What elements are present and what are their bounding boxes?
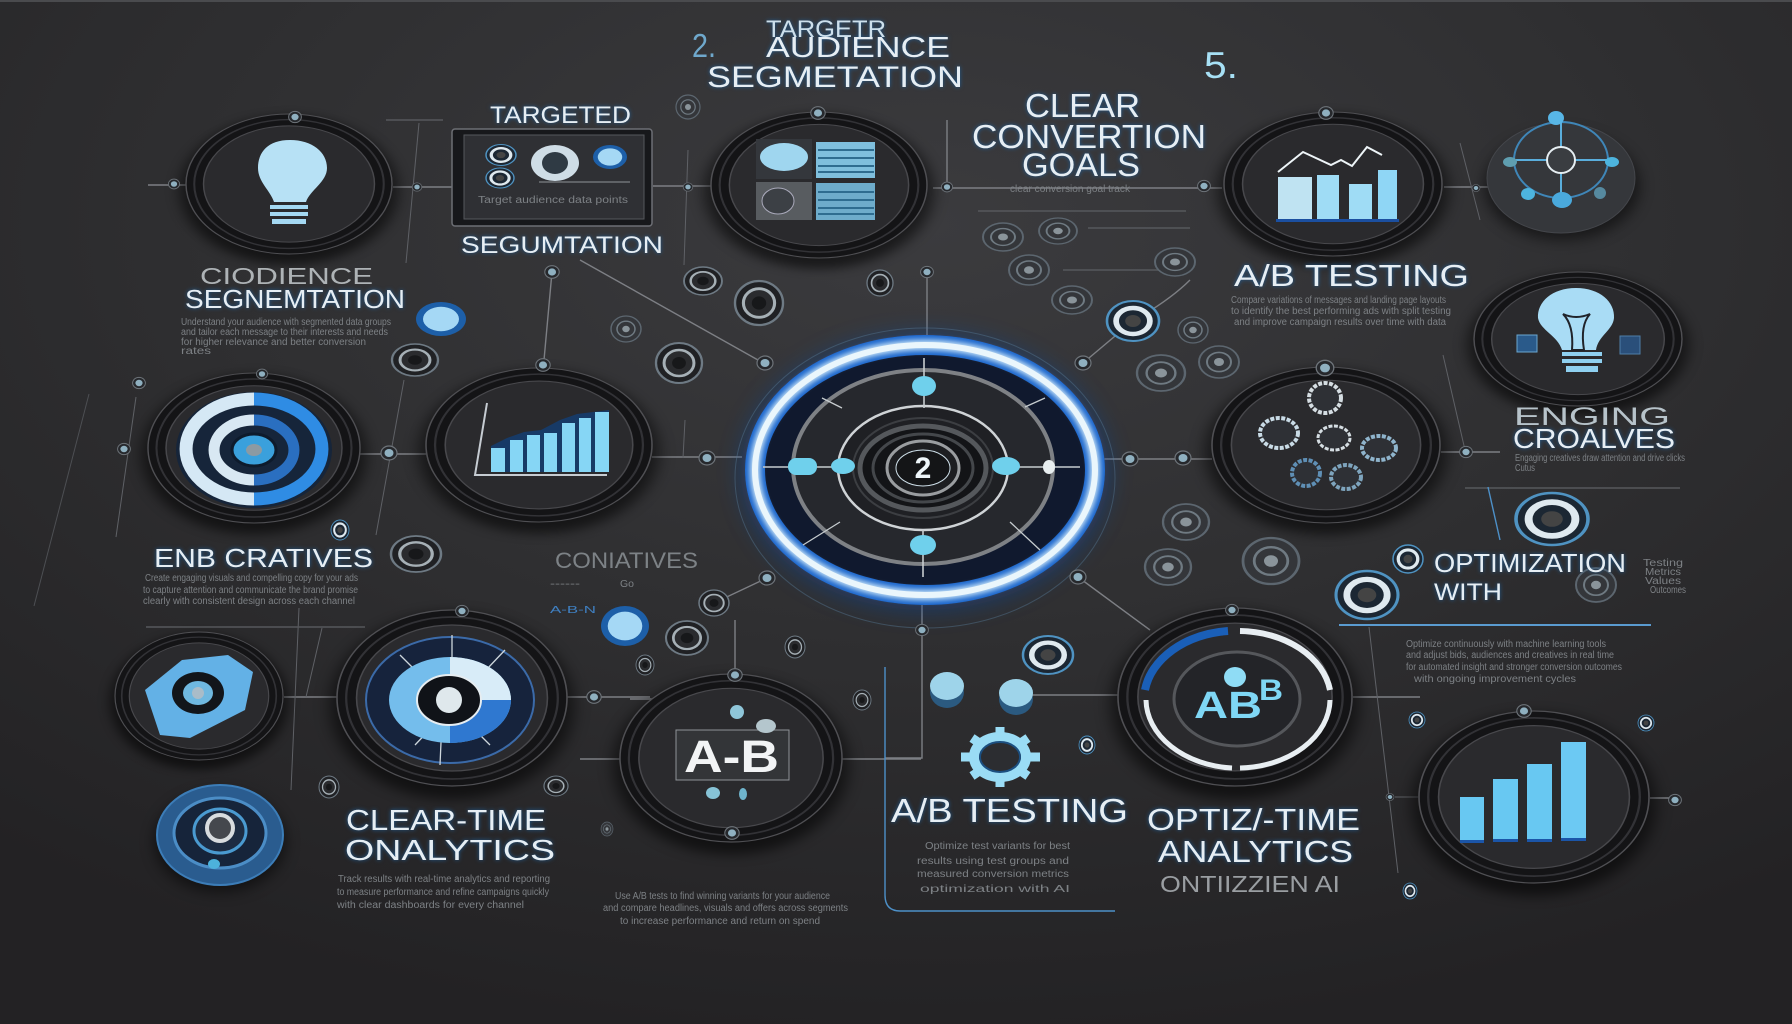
icon: target rings [176, 392, 332, 508]
text block: optimization body: with ongoing improvement cycles [1413, 674, 1576, 685]
text block: analytics body [336, 874, 550, 911]
text block: audience body: Understand your audience with segmented data groups [181, 317, 391, 328]
icon: AB dial: B [1259, 674, 1283, 707]
label: optimization with: WITH [1434, 579, 1502, 606]
icon: growth chart ring [419, 368, 659, 534]
icon: radar ring [330, 610, 574, 799]
label: targeted: TARGETED [490, 102, 631, 129]
text block: creatives body [143, 573, 358, 607]
icon: chart ring [1217, 112, 1449, 267]
icon: blue swirl disc [154, 785, 286, 892]
label: optiz-time analytics [1147, 802, 1360, 869]
icon: A/B knobs [930, 672, 1033, 715]
icon: AB dial ring [1111, 608, 1359, 799]
label: audience segmentation: SEGNEMTATION [185, 284, 405, 314]
label: clear conversion goals: CLEAR [1025, 87, 1140, 124]
label: clear-time analytics: CLEAR-TIME [346, 805, 546, 837]
heading: targeted audience segmentation: SEGMETATION [707, 61, 963, 94]
icon: bulb ring with chips [1468, 272, 1688, 416]
text block: creatives body: to capture attention and communicate the brand promise [143, 585, 358, 596]
icon: target ring [142, 373, 366, 534]
small satellite icons [319, 95, 1654, 899]
chart: four rising bars [1460, 742, 1586, 843]
icon: A-B badge ring [613, 674, 849, 855]
text block: A/B lower body: Optimize test variants for best [925, 841, 1070, 852]
text block: audience body [181, 317, 391, 357]
text block: optimization body: and adjust bids, audiences and creatives in real time [1406, 650, 1614, 661]
text block: A/B testing body [1231, 295, 1451, 328]
label: engaging creatives: ENGING [1514, 403, 1670, 431]
small right notes: Values [1645, 576, 1681, 587]
label: optimization with [1434, 548, 1626, 606]
hub inner rings [763, 358, 1080, 577]
text block: analytics body: with clear dashboards for every channel [336, 900, 524, 911]
outer ring connection pins [118, 107, 1681, 839]
heading: targeted audience segmentation [707, 16, 963, 94]
label: optimization AI: ONTIIZZIEN AI [1160, 871, 1340, 897]
label: optimization with: OPTIMIZATION [1434, 548, 1626, 578]
text block: A-B body: Use A/B tests to find winning variants for your audience [615, 891, 830, 902]
label: audience segmentation: CIODIENCE [200, 263, 373, 289]
text block: analytics body: Track results with real-time analytics and reporting [338, 874, 550, 885]
label: engaging creatives [1513, 403, 1675, 454]
text block: creatives body [1515, 453, 1685, 474]
icon: gear [961, 727, 1040, 787]
text block: A/B lower body [917, 841, 1070, 895]
small right notes: Outcomes [1650, 585, 1686, 596]
hub number: 2 [915, 452, 931, 485]
chart: bars with trend line [1276, 147, 1399, 222]
icon: A-B label panel [676, 705, 789, 800]
label: clear conversion goals: GOALS [1022, 147, 1140, 183]
hub glow [741, 334, 1109, 610]
text block: analytics body: to measure performance and refine campaigns quickly [337, 887, 549, 898]
icon: AB dial [1145, 631, 1330, 768]
label: segumtation: SEGUMTATION [461, 232, 663, 259]
icon: gear cluster [1260, 383, 1396, 489]
small right notes: Metrics [1645, 567, 1681, 578]
icon: data panel ring [705, 112, 933, 269]
small caption coniatives: Go [620, 579, 634, 590]
text block: A/B lower body: results using test groups and [917, 856, 1069, 867]
number 2: 2. [692, 27, 716, 64]
text block: A/B testing body: to identify the best performing ads with split testing [1231, 306, 1451, 317]
label: clear conversion goals [972, 87, 1206, 183]
label: clear-time analytics [345, 805, 555, 867]
label: clear-time analytics: ONALYTICS [345, 835, 555, 867]
panel: tablet: Target audience data points [478, 195, 628, 206]
text block: creatives body: clearly with consistent design across each channel [143, 596, 355, 607]
chart: rising bars [475, 403, 609, 475]
small caption coniatives [550, 579, 634, 616]
small right notes: Testing [1643, 558, 1683, 569]
text block: A/B lower body: measured conversion metrics [917, 869, 1069, 880]
text block: A/B testing body: Compare variations of messages and landing page layouts [1231, 295, 1446, 306]
text block: optimization body: for automated insight and stronger conversion outcomes [1406, 662, 1622, 673]
text block: A-B body [603, 891, 848, 927]
small caption under goals: clear conversion goal track [1010, 184, 1131, 195]
icon: A-B label panel: A-B [684, 731, 779, 782]
label: A/B testing lower: A/B TESTING [891, 792, 1128, 829]
text block: A-B body: to increase performance and return on spend [620, 916, 820, 927]
hub nodes [788, 376, 1055, 555]
icon: bulb with filament [1517, 288, 1640, 372]
text block: optimization body [1406, 639, 1622, 685]
text block: creatives body: Cutus [1515, 463, 1535, 474]
text block: creatives body: Create engaging visuals and compelling copy for your ads [145, 573, 358, 584]
label: creatives left: ENB CRATIVES [154, 543, 373, 573]
icon: hexagon dial ring [110, 632, 288, 770]
label: coniatives: CONIATIVES [555, 548, 698, 573]
label: optiz-time analytics: OPTIZ/-TIME [1147, 802, 1360, 837]
number 5: 5. [1204, 45, 1238, 86]
icon: radar dial [366, 635, 534, 765]
text block: audience body: and tailor each message to their interests and needs [181, 327, 388, 338]
icon: network disc [1484, 111, 1640, 240]
text block: A/B testing body: and improve campaign results over time with data [1234, 317, 1446, 328]
text block: optimization body: Optimize continuously with machine learning tools [1406, 639, 1606, 650]
small caption coniatives: ------ [550, 579, 580, 590]
small caption coniatives: A-B-N [550, 605, 596, 616]
label: clear conversion goals: CONVERTION [972, 118, 1206, 155]
label: optiz-time analytics: ANALYTICS [1158, 834, 1353, 869]
icon: four cell grid [756, 139, 875, 220]
text block: A-B body: and compare headlines, visuals and offers across segments [603, 903, 848, 914]
heading: targeted audience segmentation: TARGETR [766, 16, 886, 43]
central hub [735, 328, 1115, 628]
icon: blue hexagon dial [145, 655, 253, 738]
connector lines [34, 120, 1680, 911]
label: audience segmentation [185, 263, 405, 314]
text block: audience body: rates [181, 346, 211, 357]
text block: audience body: for higher relevance and better conversion [181, 337, 366, 348]
icon: gears ring [1205, 367, 1447, 535]
label: A/B testing upper: A/B TESTING [1234, 258, 1469, 293]
icon: bulb ring [180, 114, 398, 264]
icon: light bulb glass [258, 140, 327, 202]
icon: bar chart ring [1412, 711, 1656, 896]
text block: A/B lower body: optimization with AI [920, 884, 1070, 895]
heading: targeted audience segmentation: AUDIENCE [766, 32, 950, 64]
icon: AB dial: AB [1194, 685, 1262, 727]
small right notes [1643, 558, 1686, 596]
panel: tablet [452, 129, 652, 226]
text block: creatives body: Engaging creatives draw attention and drive clicks [1515, 453, 1685, 464]
label: engaging creatives: CROALVES [1513, 423, 1675, 454]
